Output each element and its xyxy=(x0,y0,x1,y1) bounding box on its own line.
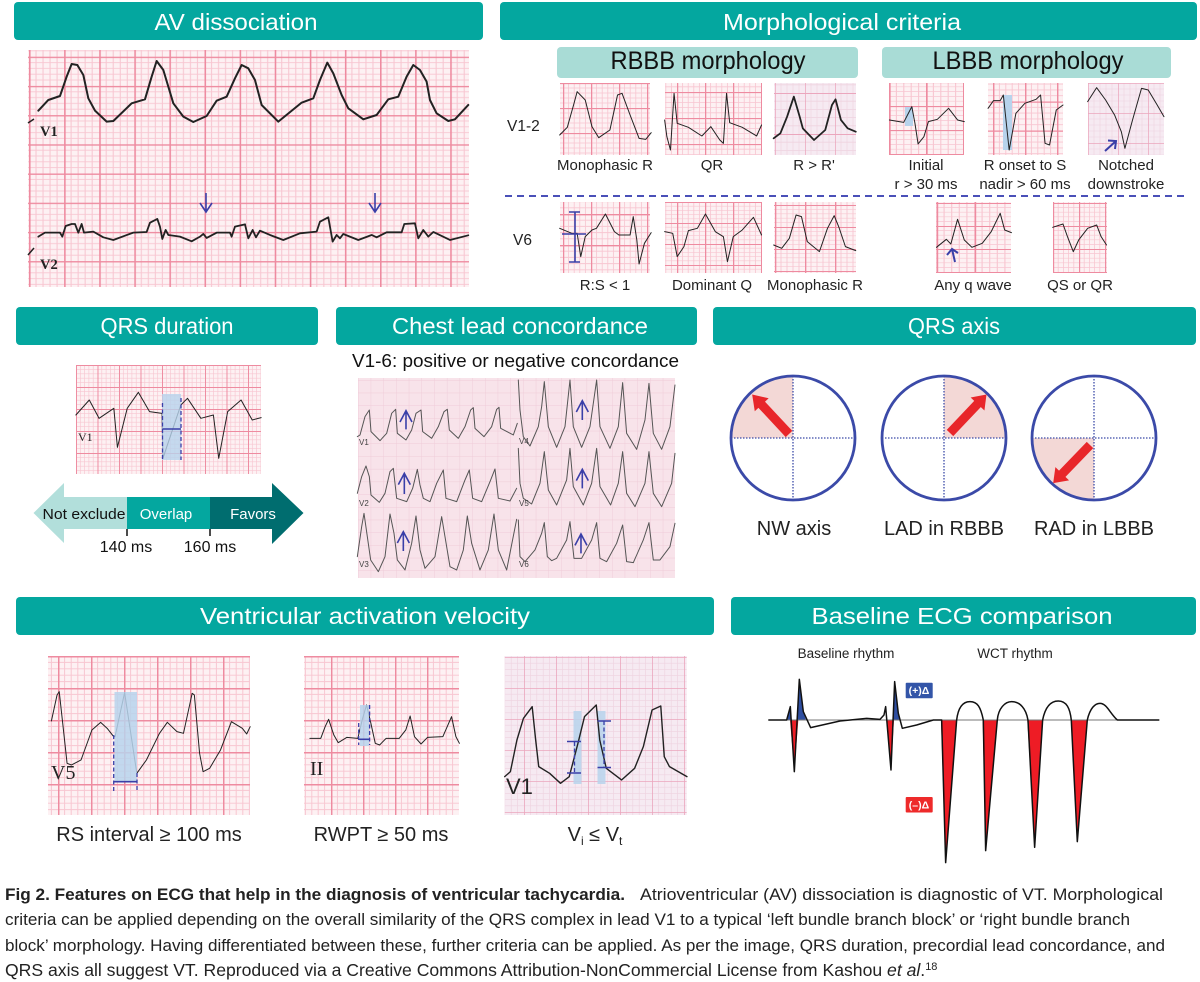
ecg: QS or QR xyxy=(1047,202,1113,294)
ecg: QR xyxy=(665,83,762,174)
ecg: Vi and Vt xyxy=(505,656,687,848)
ecg: RWPT: RWPT ≥ 50 ms xyxy=(314,824,448,846)
ecg: QRS width measurement: V1 xyxy=(78,430,93,444)
ecg: Vi and Vt: ≤ V xyxy=(584,824,620,846)
subtitle: V1-6: positive or negative concordance xyxy=(352,351,679,371)
ecg: Dominant Q xyxy=(665,202,762,294)
axis dial: LAD in RBBB xyxy=(882,376,1006,540)
badge: negative delta: (–)Δ xyxy=(909,800,930,812)
caption: 18 xyxy=(925,961,937,973)
arrow scale: not exclude, overlap, favors: Favors xyxy=(230,506,276,523)
ecg: Monophasic R V1-2 xyxy=(557,83,653,174)
panel: QRS duration xyxy=(16,307,318,556)
ecg: R onset to S nadir > 60 ms: R onset to S xyxy=(984,157,1066,174)
ecg: Monophasic R V6: Monophasic R xyxy=(767,277,863,294)
chart: V1 and V2 rhythm strips: V2 xyxy=(40,257,58,273)
row label: V6: V6 xyxy=(513,232,532,249)
panel: ventricular activation velocity xyxy=(16,597,714,848)
badge: positive delta: (+)Δ xyxy=(909,685,930,697)
panel: morphological criteria xyxy=(500,2,1197,294)
axis dial: LAD in RBBB: LAD in RBBB xyxy=(884,518,1004,540)
ecg: RS interval: V5 xyxy=(51,762,75,784)
ecg: six chest leads: V3 xyxy=(359,560,369,569)
badge: positive delta xyxy=(906,683,933,698)
heading: Baseline ECG comparison: Baseline ECG comparison xyxy=(812,603,1112,629)
arrow: dissociated P wave xyxy=(200,193,212,212)
ecg: six chest leads xyxy=(357,378,675,578)
ecg: six chest leads: V6 xyxy=(519,560,529,569)
panel: baseline ECG comparison xyxy=(731,597,1196,863)
arrow scale: not exclude, overlap, favors: 140 ms xyxy=(100,539,152,556)
ecg: Any q wave xyxy=(934,202,1012,294)
ecg: RS interval: RS interval ≥ 100 ms xyxy=(56,824,242,846)
ecg: RWPT: II xyxy=(310,758,323,780)
ecg: R onset to S nadir > 60 ms xyxy=(979,83,1071,193)
caption: QRS axis all suggest VT. Reproduced via a Creative Commons Attribution-NonCommercial License from Kashou et al. xyxy=(5,960,925,980)
ecg: Dominant Q: Dominant Q xyxy=(672,277,752,294)
arrow: dissociated P wave xyxy=(369,193,381,212)
arrow scale: not exclude, overlap, favors: 160 ms xyxy=(184,539,236,556)
ecg: Monophasic R V6 xyxy=(767,202,863,294)
heading: QRS duration xyxy=(16,307,318,345)
heading: Chest lead concordance xyxy=(336,307,697,345)
axis dial: NW axis: NW axis xyxy=(757,518,831,540)
arrow scale: not exclude, overlap, favors: Not exclude xyxy=(42,506,126,523)
panel: chest lead concordance xyxy=(336,307,697,578)
ecg: six chest leads: V4 xyxy=(519,437,529,446)
axis dial: NW axis xyxy=(731,376,855,540)
subheading: LBBB morphology xyxy=(882,47,1171,78)
ecg: Initial r > 30 ms: Initial xyxy=(908,157,944,174)
caption: block’ morphology. Having differentiated between these, further criteria can be applied. As per the image, QRS duration, precordial lead concordance, and xyxy=(5,936,1165,955)
panel: QRS axis xyxy=(713,307,1196,540)
heading: Morphological criteria xyxy=(500,2,1197,40)
ecg: six chest leads: V5 xyxy=(519,499,529,508)
panel: AV dissociation xyxy=(14,2,483,287)
ecg: Vi and Vt: V1 xyxy=(506,774,533,799)
ecg: Notched downstroke xyxy=(1088,83,1164,193)
heading: QRS axis xyxy=(713,307,1196,345)
ecg: R:S < 1: R:S < 1 xyxy=(580,277,630,294)
ecg: QRS width measurement xyxy=(76,365,261,474)
ecg: six chest leads: V2 xyxy=(359,499,369,508)
heading: QRS duration: QRS duration xyxy=(100,313,234,339)
ecg: six chest leads: V1 xyxy=(359,438,369,447)
caption: Fig 2. Features on ECG that help in the diagnosis of ventricular tachycardia. xyxy=(5,885,625,904)
chart: baseline vs WCT waveform xyxy=(768,679,1159,863)
ecg: Notched downstroke: downstroke xyxy=(1088,176,1164,193)
arrow scale: not exclude, overlap, favors xyxy=(34,483,304,556)
heading: Morphological criteria: Morphological criteria xyxy=(723,9,961,35)
subheading: RBBB morphology xyxy=(557,47,858,78)
heading: AV dissociation: AV dissociation xyxy=(154,9,318,35)
heading: Baseline ECG comparison xyxy=(731,597,1196,635)
chart: V1 and V2 rhythm strips: V1 xyxy=(40,124,58,140)
ecg: R onset to S nadir > 60 ms: nadir > 60 ms xyxy=(979,176,1071,193)
ecg: Vi and Vt: i xyxy=(581,834,584,848)
caption xyxy=(5,885,1165,980)
heading: Ventricular activation velocity xyxy=(16,597,714,635)
ecg: R > R' xyxy=(774,83,856,174)
label: WCT rhythm: WCT rhythm xyxy=(977,646,1053,661)
ecg: Any q wave: Any q wave xyxy=(934,277,1012,294)
heading: QRS axis: QRS axis xyxy=(908,313,1000,339)
ecg: R > R': R > R' xyxy=(793,157,835,174)
caption: Atrioventricular (AV) dissociation is diagnostic of VT. Morphological xyxy=(640,885,1163,904)
ecg: Initial r > 30 ms: r > 30 ms xyxy=(895,176,957,193)
ecg: Initial r > 30 ms xyxy=(889,83,964,193)
caption: criteria can be applied depending on the overall similarity of the QRS complex in lead V1 to a typical ‘left bundle branch block’ or ‘right bundle branch xyxy=(5,910,1130,929)
ecg: R:S < 1 xyxy=(560,202,651,294)
ecg: Vi and Vt: V xyxy=(568,824,581,846)
ecg: QR: QR xyxy=(701,157,723,174)
chart: V1 and V2 rhythm strips xyxy=(28,50,469,287)
ecg: QS or QR: QS or QR xyxy=(1047,277,1113,294)
subheading: RBBB morphology: RBBB morphology xyxy=(610,47,806,75)
heading: AV dissociation xyxy=(14,2,483,40)
ecg: RWPT xyxy=(304,656,459,846)
badge: negative delta xyxy=(906,797,933,812)
axis dial: RAD in LBBB: RAD in LBBB xyxy=(1034,518,1154,540)
row label: V1-2: V1-2 xyxy=(507,118,540,135)
arrow: positive concordance marks xyxy=(397,401,588,553)
ecg: Notched downstroke: Notched xyxy=(1098,157,1154,174)
ecg: Vi and Vt: t xyxy=(619,834,623,848)
arrow scale: not exclude, overlap, favors: Overlap xyxy=(140,506,192,523)
label: Baseline rhythm: Baseline rhythm xyxy=(798,646,894,661)
heading: Ventricular activation velocity: Ventricular activation velocity xyxy=(200,603,531,629)
axis dial: RAD in LBBB xyxy=(1032,376,1156,540)
heading: Chest lead concordance: Chest lead concordance xyxy=(392,313,648,339)
ecg: Monophasic R V1-2: Monophasic R xyxy=(557,157,653,174)
ecg: RS interval xyxy=(48,656,250,846)
subheading: LBBB morphology: LBBB morphology xyxy=(932,47,1124,75)
